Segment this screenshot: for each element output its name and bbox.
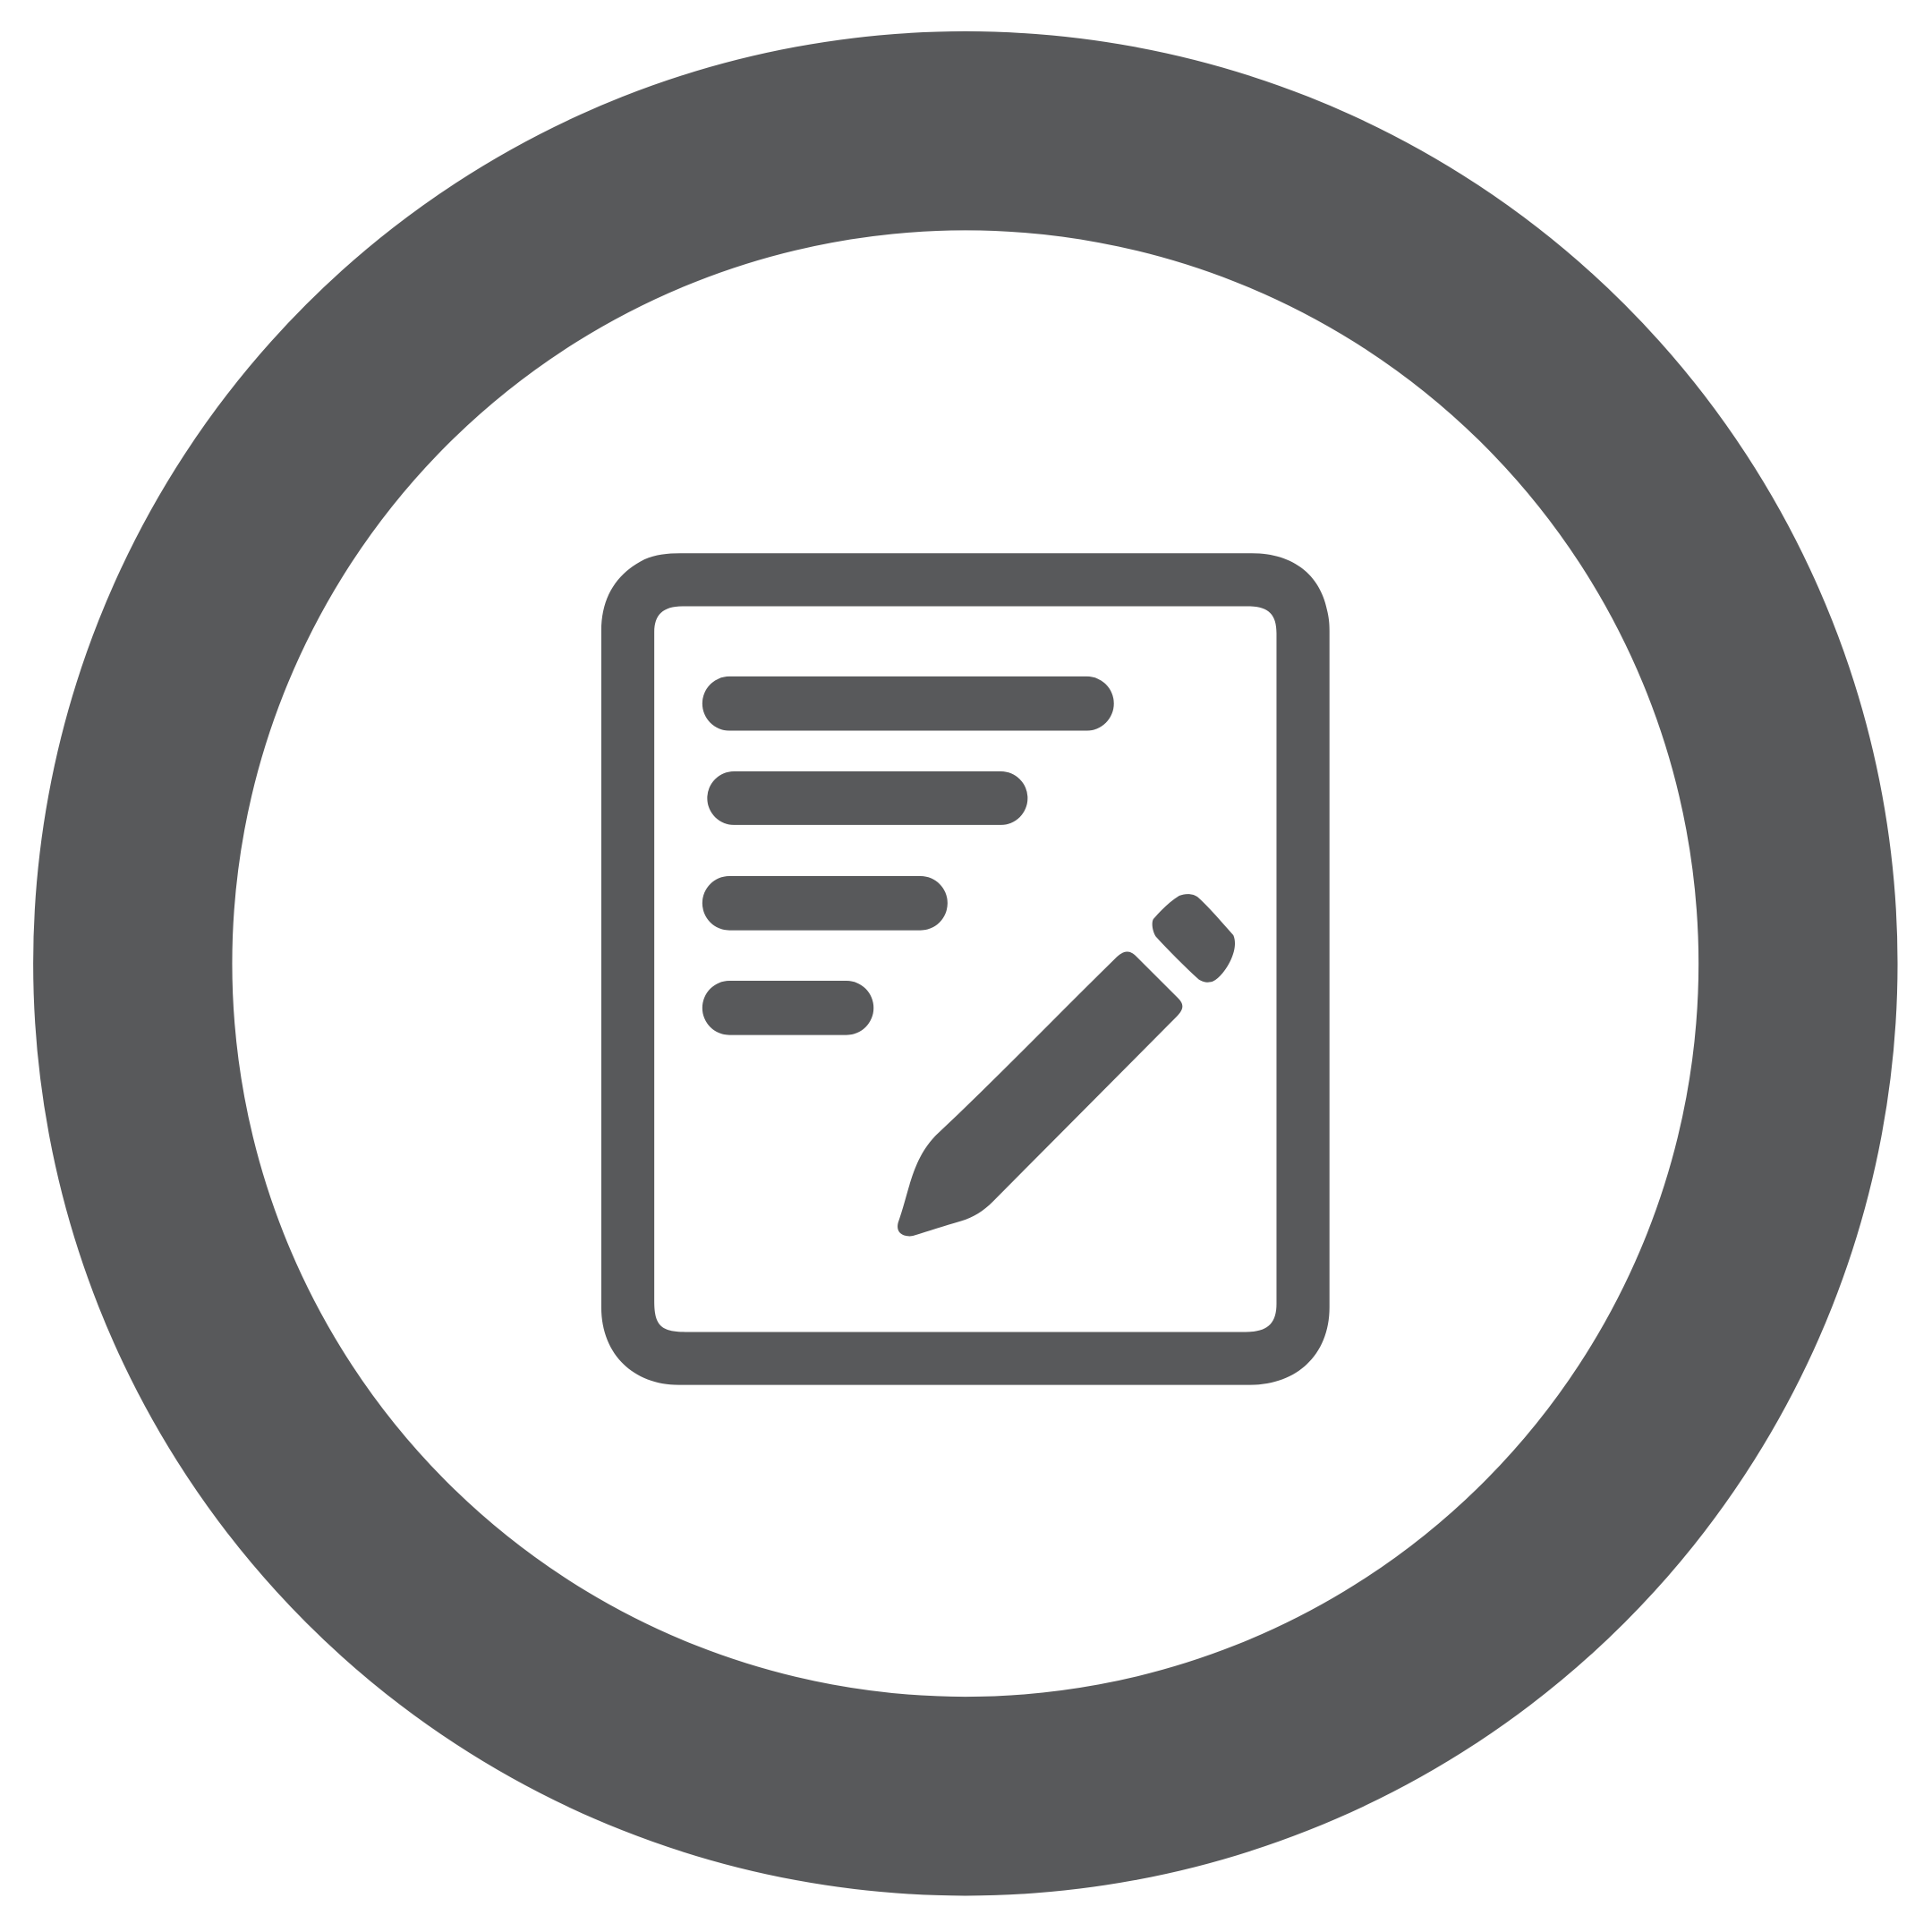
icon: document [601, 553, 1330, 1385]
ring [132, 131, 1798, 1796]
pencil eraser [1153, 894, 1235, 983]
text line 3 [702, 876, 948, 931]
document frame [601, 553, 1330, 1385]
text line 2 [707, 771, 1027, 825]
text line 4 [702, 981, 873, 1035]
pencil body [898, 951, 1182, 1236]
text line 1 [702, 677, 1114, 731]
icon: pencil [898, 894, 1235, 1236]
